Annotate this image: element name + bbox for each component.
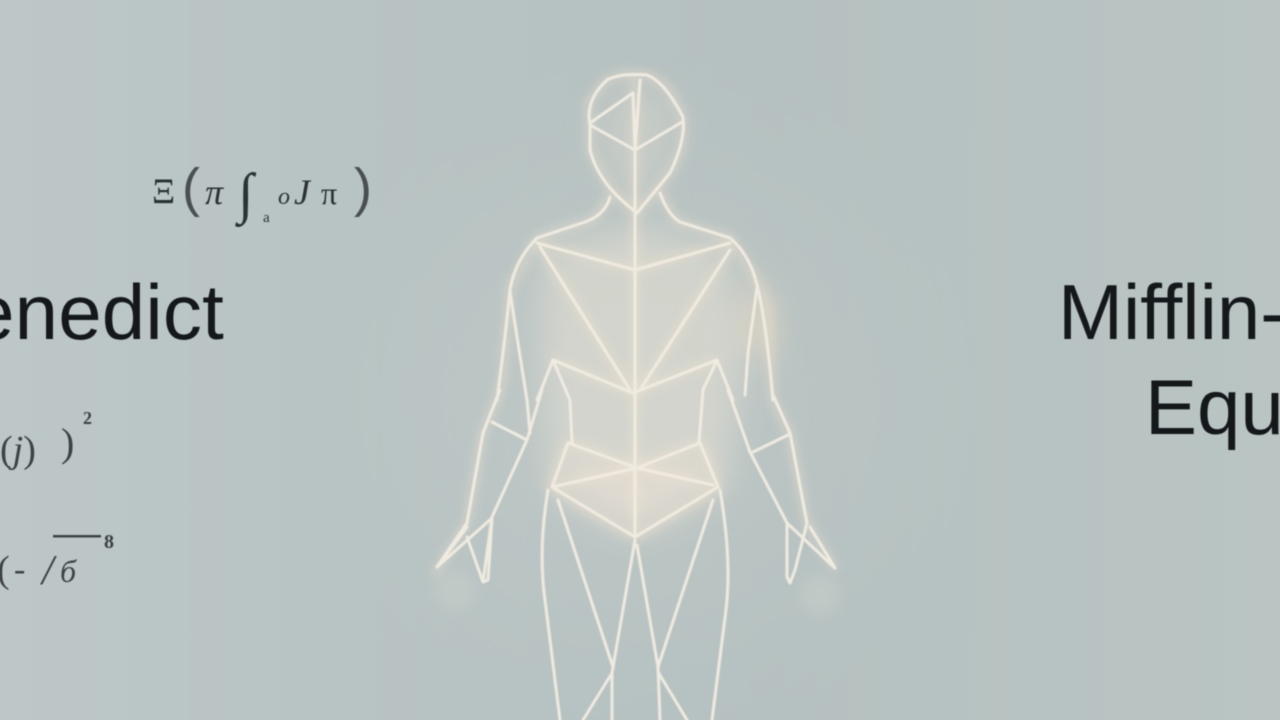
top formula: π [205,172,224,212]
top formula: ( [182,158,200,218]
chest [537,243,730,390]
top formula: o [278,184,290,210]
left arm [437,292,542,582]
left formula line 2: 8 [104,531,114,553]
head [589,75,683,213]
left formula line 1: (j) [0,429,36,471]
top formula: π [321,175,337,211]
body warm fill [540,84,772,535]
top formula: ) [354,158,372,218]
figure: glowing wireframe human body [435,74,840,720]
left formula line 2: / [40,548,57,594]
top formula: J [294,172,312,212]
top formula: a [263,210,270,226]
hand glows [435,570,840,615]
legs [542,490,728,720]
left hand [437,518,492,582]
top formula [152,158,372,228]
line glow [435,74,835,573]
centre line [634,150,636,537]
right arm [728,288,807,583]
top formula: ∫ [235,163,257,228]
wireframe lines [437,75,835,720]
left formula line 2: - [14,551,25,588]
left formula line 1: ) [61,420,74,465]
neck and shoulders [497,193,773,400]
left formula line 1: 2 [83,408,92,428]
right hand [787,523,835,568]
left formula line 2 [0,531,114,594]
hips [552,443,718,537]
top formula: Ξ [152,171,175,211]
left formula line 2: б [60,553,77,589]
left formula line 1 [0,408,92,471]
